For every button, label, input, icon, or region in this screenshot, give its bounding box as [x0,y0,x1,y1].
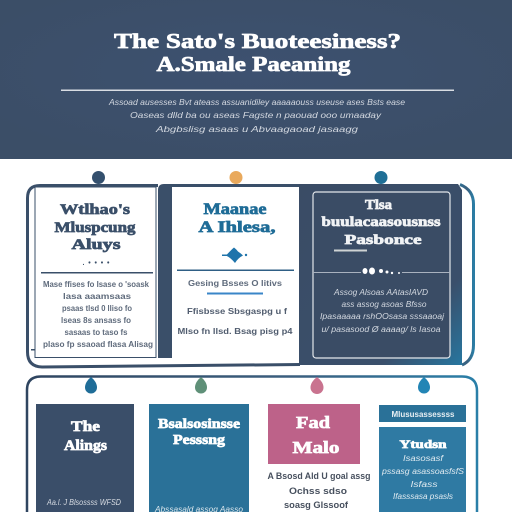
dark card body: ass assog asoas Bfsso [342,300,427,309]
drop: blue [85,377,97,394]
panel: left card [35,187,156,358]
panel: pink block [268,404,360,464]
left card heading: Mluspcung [54,220,136,236]
pink block heading: Malo [292,438,340,457]
header description: Oaseas dlld ba ou aseas Fagste n paouad ooo umaaday [130,110,382,120]
info card body: Isfass [410,480,438,489]
middle card body [178,306,293,336]
pink block text: A Bsosd Ald U goal assg [268,471,370,481]
left card body: psaas tlsd 0 lliso fo [62,304,132,313]
pink block heading: Fad [296,413,331,432]
title: The Sato's Buoteesiness? [114,29,401,53]
dark card accent [334,250,367,252]
pin: orange [230,171,242,184]
title: A.Smale Paeaning [156,52,351,76]
left card heading [54,202,136,253]
navy card caption: Aa.l. J Blsossss WFSD [46,497,121,507]
dark card heading: buulacaasousnss [322,215,441,230]
panel: blue card [149,404,249,512]
panel: middle card [172,187,299,358]
dark card heading: Tlsa [365,198,392,213]
pink block text: soasg Glssoof [284,500,349,510]
panel: dark strip between cards [158,184,300,358]
left card body: sasaas to taso fs [64,328,128,337]
middle card body: Ffisbsse Sbsgaspg u f [187,306,287,316]
header banner [0,0,512,159]
navy card heading: The [71,419,100,435]
info card body [381,454,465,501]
blue card heading [158,416,240,447]
panel: dark right card [299,184,462,365]
left card body: lseas 8s ansass fo [61,316,131,325]
dark card body: u/ pasasood Ø aaaag/ ls Iasoa [322,325,441,334]
left card ornament: . • • • • [82,260,110,267]
drop: teal [418,377,430,394]
left card body [43,280,153,349]
info card body: Ifasssasa psasls [393,492,453,501]
middle card subtitle: Gesing Bsses O litivs [188,278,282,288]
header description [108,97,405,134]
middle card body: Mlso fn llsd. Bsag pisg p4 [178,326,293,336]
left card heading: Aluys [72,237,121,253]
dark card heading [322,198,441,248]
panel: blue info card [379,427,466,512]
left card body: Mase ffises fo Isase o 'soask [43,280,150,289]
dark card body: Ipasaaaaa rshOOsasa sssaaoaj [320,312,444,321]
panel: blue label bar: Mlususassessss [392,409,455,419]
header divider [61,90,454,91]
info card body: pssasg asassoasfsfS [381,467,465,476]
navy card heading: Alings [64,438,107,454]
left card body: plaso fp ssaoad flasa Alisag [43,340,153,349]
header description: Abgbslisg asaas u Abvaagaoad jasaagg [155,124,358,134]
pink block heading [292,413,340,457]
left card body: lasa aaamsaas [63,292,132,301]
info card heading: Ytudsn [400,437,447,451]
dark card body: Assog Alsoas AAtasIAVD [333,288,428,297]
top outer frame [28,184,474,367]
dark card heading: Pasbonce [344,233,422,248]
pin: teal [374,171,388,184]
middle card heading [198,201,276,236]
header description: Assoad ausesses Bvt ateass assuanidiley aaaaaouss useuse ases Bsts ease [108,97,405,107]
pink block text: Ochss sdso [289,486,348,496]
middle card wave icon [222,248,247,263]
panel: navy card [36,404,134,512]
bottom outer frame [27,376,477,512]
pin: navy [92,171,105,184]
title [114,29,401,76]
blue card heading: Pesssng [173,432,225,447]
drop: green [195,377,207,394]
blue card heading: Bsalsosinsse [158,416,240,431]
left card heading: Wtlhao's [60,202,130,218]
left card divider [41,272,153,274]
middle card heading: Maanae [204,201,266,218]
navy card heading [64,419,107,454]
middle card divider [177,270,294,271]
pink block text [268,471,370,510]
drop: pink [310,377,324,394]
middle card heading: A Ihlesa, [198,219,276,236]
dark card body [320,288,444,334]
panel: blue label bar [379,405,466,422]
info card body: Isasosasf [403,454,444,463]
middle card accent [207,292,263,294]
dark card divider with ornament [313,268,450,274]
